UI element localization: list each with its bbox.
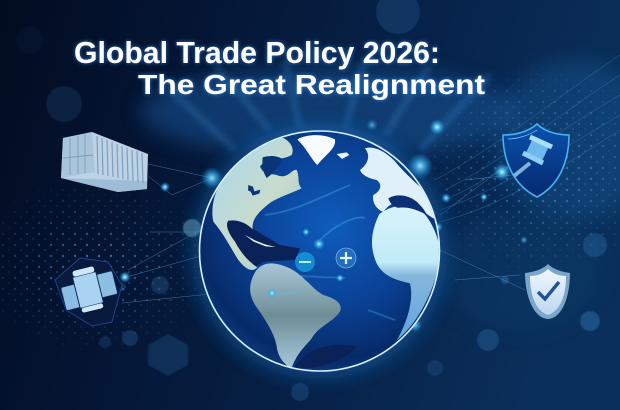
continent: North America [212,137,302,270]
icon: machinery hexagon badge [55,258,122,326]
continent: Mediterranean [388,195,427,215]
icon: minus badge [295,252,315,272]
continent: Africa [372,206,441,341]
continent: Great Lakes [248,156,282,196]
continents [212,135,441,369]
globe halo [174,106,464,396]
globe rim [200,131,440,371]
continent: Europe [360,148,437,220]
continent: Greenland [297,135,335,165]
globe [181,118,456,388]
title line 1: Global Trade Policy 2026: [74,35,440,70]
ocean data traces [265,185,395,320]
title [74,35,485,100]
dark sea: Gulf and Caribbean [225,221,300,268]
title line 2: The Great Realignment [138,69,485,100]
icon: shipping container [61,132,148,192]
ocean spots [267,228,344,298]
icon: checkmark shield [525,264,570,319]
gavel [514,137,552,176]
globe ocean [200,131,440,371]
light spots [119,119,528,332]
continent: South America [250,263,341,368]
icon: gavel shield [503,124,569,197]
continent: Caribbean and Iceland [245,152,349,247]
network connector lines [122,164,540,303]
icon: plus badge [336,248,356,268]
dark sea: Southern Ocean [293,345,357,369]
